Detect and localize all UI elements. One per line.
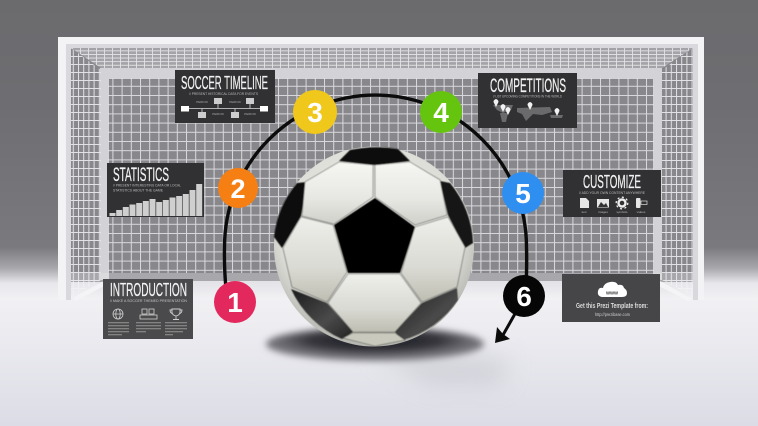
white patches — [283, 162, 465, 346]
ball shadow — [266, 327, 510, 385]
heading: COMPETITIONS — [490, 76, 566, 97]
icon labels: videos — [637, 210, 646, 214]
heading: SOCCER TIMELINE — [181, 73, 268, 93]
icon: cloud with www: WWW — [606, 290, 619, 296]
panel: introduction — [103, 279, 193, 339]
step badge 5: 5 — [515, 178, 531, 209]
heading: INTRODUCTION — [110, 280, 187, 300]
url: http://prezibase.com — [595, 312, 630, 317]
subheading: // LIST UPCOMING COMPETITIONS IN THE WORLD — [493, 94, 562, 98]
step badge 2 — [218, 168, 258, 208]
icon: trophy — [170, 309, 182, 320]
back net wall — [71, 48, 693, 282]
icon: team — [140, 309, 157, 319]
floor inside goal — [71, 281, 693, 426]
back frame — [100, 68, 662, 280]
front frame — [58, 37, 704, 300]
timeline diagram: PERIOD — [229, 100, 242, 104]
heading: STATISTICS — [113, 165, 169, 186]
step badge 3 — [293, 90, 337, 134]
step badge 5 — [502, 172, 544, 214]
icon: video — [636, 198, 647, 208]
panel: competitions — [478, 73, 577, 128]
panel: soccer timeline — [175, 70, 275, 123]
panel: statistics — [107, 163, 204, 217]
right side net — [662, 48, 693, 297]
icon labels: images — [598, 210, 608, 214]
timeline diagram: PERIOD — [196, 100, 209, 104]
curved path line — [224, 95, 527, 288]
black patches — [274, 147, 473, 340]
step badge 3: 3 — [307, 97, 323, 128]
base bars — [72, 281, 692, 301]
body text lines — [108, 322, 187, 335]
icon labels: symbols — [616, 210, 628, 214]
map pins — [494, 99, 559, 116]
arrow — [495, 312, 516, 343]
step badge 4: 4 — [433, 97, 449, 128]
soccer ball — [274, 146, 474, 346]
step badge 1 — [214, 281, 256, 323]
world map — [493, 105, 563, 122]
left side net — [71, 48, 101, 297]
step badge 6: 6 — [516, 281, 532, 312]
panel: statistics: STATISTICS ABOUT THE GAME — [113, 188, 163, 192]
icon labels: text — [582, 210, 587, 214]
subheading: // MAKE A SOCCER THEMED PRESENTATION — [110, 298, 187, 303]
timeline diagram — [181, 98, 268, 118]
call to action: Get this Prezi Template from: — [576, 303, 648, 310]
subheading: // PRESENT INTERESTING DATA OR LOCAL — [113, 182, 182, 188]
panel: get this template — [562, 274, 660, 322]
icon labels — [582, 210, 646, 214]
step badge 4 — [420, 91, 462, 133]
timeline diagram: PERIOD — [212, 112, 225, 116]
icon: gear — [616, 197, 628, 209]
heading: CUSTOMIZE — [583, 172, 641, 192]
icon: globe — [113, 309, 123, 319]
step badge 6 — [503, 275, 545, 317]
bar chart — [110, 184, 202, 216]
subheading: // ADD YOUR OWN CONTENT ANYWHERE — [579, 190, 645, 195]
panel: customize — [563, 170, 661, 217]
step badge 1: 1 — [227, 287, 243, 318]
subheading: // PRESENT HISTORICAL DATA FOR EVENTS — [189, 91, 258, 96]
timeline diagram: PERIOD — [244, 112, 257, 116]
icon: document — [580, 198, 589, 208]
top net — [71, 48, 693, 68]
icon: image — [597, 199, 609, 208]
step badge 2: 2 — [230, 174, 246, 204]
